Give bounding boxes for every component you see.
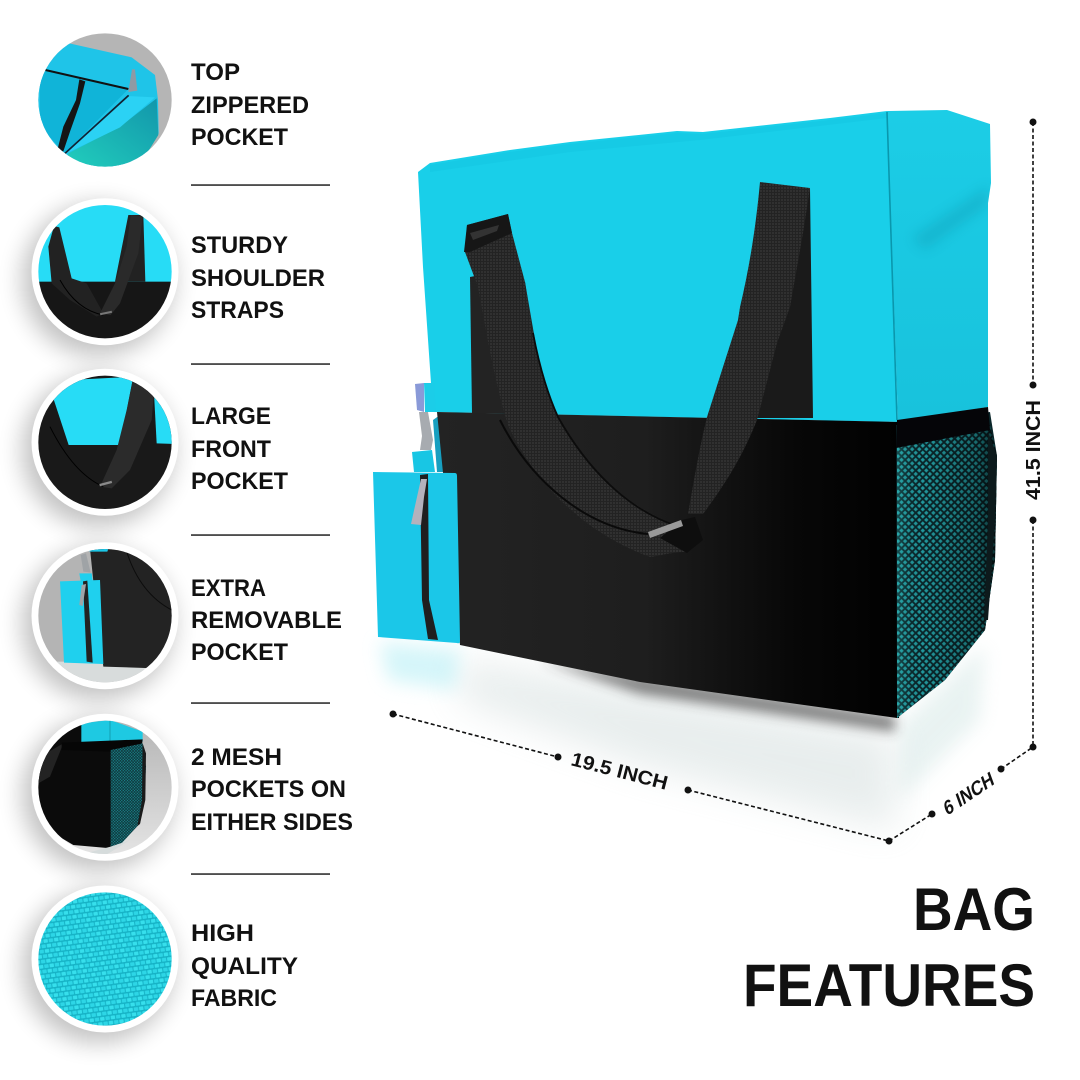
label: 2 mesh pockets: 2 MESH bbox=[191, 744, 282, 771]
title: bag features bbox=[743, 876, 1035, 1019]
label: top zippered pocket: POCKET bbox=[191, 124, 288, 151]
bag side panel teal bbox=[887, 110, 991, 422]
title: bag features: FEATURES bbox=[743, 952, 1035, 1019]
label: large front pocket: LARGE bbox=[191, 403, 271, 430]
strap tail loop bbox=[660, 517, 703, 553]
icon: mesh pocket photo bbox=[22, 714, 178, 871]
top lip highlight bbox=[430, 113, 887, 172]
bag front panel teal bbox=[418, 111, 898, 422]
dimension: width 19.5 inch: 19.5 INCH bbox=[569, 749, 670, 795]
label: sturdy shoulder straps: STRAPS bbox=[191, 297, 284, 324]
icon: zippered pocket photo bbox=[38, 33, 172, 167]
dimension: height 41.5 inch bbox=[1023, 118, 1045, 750]
right strap bbox=[688, 182, 810, 514]
mesh sliver and clip hook bbox=[412, 383, 449, 472]
dimension: depth 6 inch bbox=[889, 747, 1033, 841]
strap slider buckle bbox=[648, 520, 683, 538]
label: top zippered pocket bbox=[191, 59, 309, 151]
strap anchor panels bbox=[470, 188, 813, 418]
dimension: depth 6 inch: 6 INCH bbox=[941, 768, 997, 821]
label: sturdy shoulder straps: STURDY bbox=[191, 232, 288, 259]
label: extra removable pocket: POCKET bbox=[191, 639, 288, 666]
label: high quality fabric: FABRIC bbox=[191, 985, 277, 1012]
icon: front pocket photo bbox=[22, 369, 178, 527]
bag reflection on floor bbox=[380, 642, 985, 830]
label: extra removable pocket bbox=[191, 575, 342, 666]
side panel crease shadow bbox=[916, 191, 989, 248]
side mesh pocket bbox=[896, 412, 997, 718]
label: sturdy shoulder straps bbox=[191, 232, 325, 324]
feature: extra removable pocket bbox=[22, 542, 342, 700]
left strap bbox=[464, 214, 692, 557]
dimension: height 41.5 inch: 41.5 INCH bbox=[1023, 400, 1045, 500]
label: large front pocket: FRONT bbox=[191, 436, 271, 463]
side elastic band bbox=[896, 407, 990, 448]
title: bag features: BAG bbox=[913, 876, 1035, 943]
product: tote bag bbox=[373, 110, 997, 718]
label: high quality fabric: HIGH bbox=[191, 920, 254, 947]
label: top zippered pocket: ZIPPERED bbox=[191, 92, 309, 119]
feature: sturdy shoulder straps bbox=[22, 198, 325, 356]
clip teal tab bbox=[424, 383, 436, 412]
label: top zippered pocket: TOP bbox=[191, 59, 240, 86]
icon: shoulder straps photo bbox=[22, 198, 178, 356]
label: extra removable pocket: REMOVABLE bbox=[191, 607, 342, 634]
feature: large front pocket bbox=[22, 369, 288, 527]
feature: high quality fabric bbox=[22, 886, 298, 1043]
icon: fabric swatch photo bbox=[22, 886, 178, 1043]
label: extra removable pocket: EXTRA bbox=[191, 575, 266, 602]
bag side seam bbox=[887, 112, 897, 420]
label: large front pocket bbox=[191, 403, 288, 495]
detachable pouch bbox=[373, 472, 460, 643]
label: large front pocket: POCKET bbox=[191, 468, 288, 495]
label: 2 mesh pockets: EITHER SIDES bbox=[191, 809, 353, 836]
label: high quality fabric bbox=[191, 920, 298, 1012]
label: 2 mesh pockets bbox=[191, 744, 353, 836]
label: sturdy shoulder straps: SHOULDER bbox=[191, 265, 325, 292]
label: high quality fabric: QUALITY bbox=[191, 953, 298, 980]
bag front black panel bbox=[437, 412, 899, 718]
feature: 2 mesh pockets bbox=[22, 714, 353, 871]
label: 2 mesh pockets: POCKETS ON bbox=[191, 776, 346, 803]
dimension: width 19.5 inch bbox=[390, 710, 892, 844]
icon: removable pouch photo bbox=[22, 542, 178, 700]
feature: top zippered pocket bbox=[33, 30, 309, 170]
